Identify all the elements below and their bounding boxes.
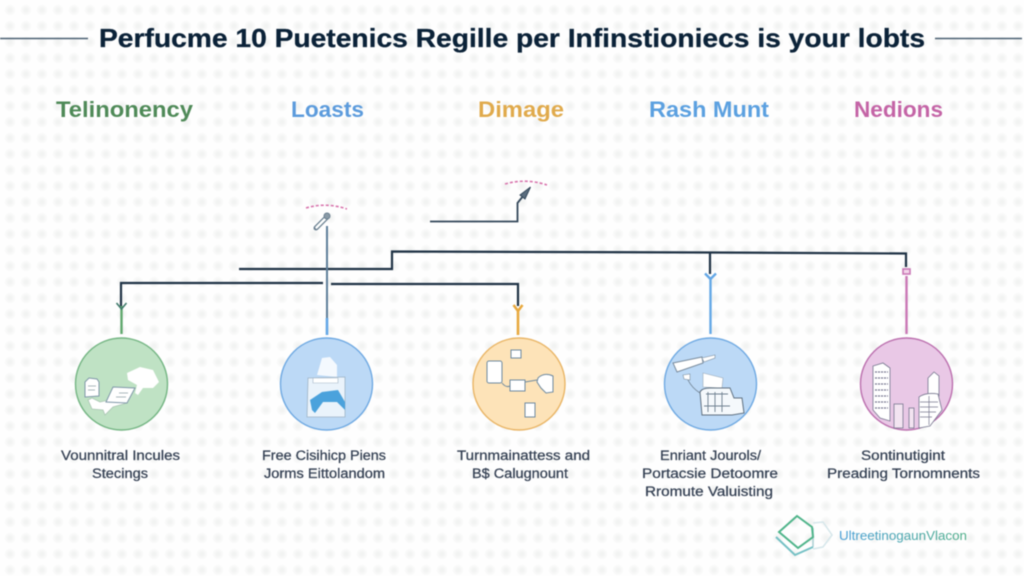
category headings: Rash Munt <box>649 97 770 122</box>
caption: orange <box>457 448 590 481</box>
category headings: Loasts <box>291 97 364 122</box>
caption: blue right: Enriant Jourols/ <box>660 448 761 463</box>
title: Perfucme 10 Puetenics Regille per Infinstioniecs is your lobts <box>99 23 925 53</box>
caption: blue: Free Cisihicp Piens <box>262 448 386 463</box>
category headings: Telinonency <box>56 97 194 122</box>
arrow: blue right <box>705 274 716 334</box>
caption: green: Stecings <box>92 466 148 481</box>
caption: orange: Turnmainattess and <box>457 448 590 463</box>
caption: pink: Sontinutigint <box>861 448 945 463</box>
category headings: Nedions <box>854 97 943 122</box>
caption: pink <box>827 448 980 481</box>
logo: UltreetinogaunVlacon <box>839 528 967 543</box>
caption: blue right <box>642 448 778 499</box>
caption: pink: Preading Tornomnents <box>827 466 980 481</box>
panel: blue circle with machines icon <box>664 338 756 430</box>
panel: pink circle with city icon <box>860 338 952 430</box>
caption: blue right: Portacsie Detoomre <box>642 466 778 481</box>
arrow: blue centre with microphone icon <box>306 205 347 335</box>
logo <box>776 516 967 555</box>
caption: blue: Jorms Eittolandom <box>264 466 385 481</box>
upward arrow <box>430 181 547 222</box>
caption: orange: B$ Calugnount <box>472 466 568 481</box>
panel: green circle icon <box>76 338 168 430</box>
category headings <box>56 97 943 122</box>
arrow: orange <box>514 305 522 335</box>
panel: orange circle icon <box>473 338 565 430</box>
caption: blue <box>262 448 386 481</box>
arrow: green <box>116 303 126 334</box>
caption: green <box>61 448 180 481</box>
caption: blue right: Rromute Valuisting <box>645 484 773 499</box>
arrow: pink <box>903 269 910 334</box>
connector lines <box>121 252 906 306</box>
caption: green: Vounnitral Incules <box>61 448 180 463</box>
category headings: Dimage <box>478 97 564 122</box>
panel: blue circle icon <box>280 338 372 430</box>
